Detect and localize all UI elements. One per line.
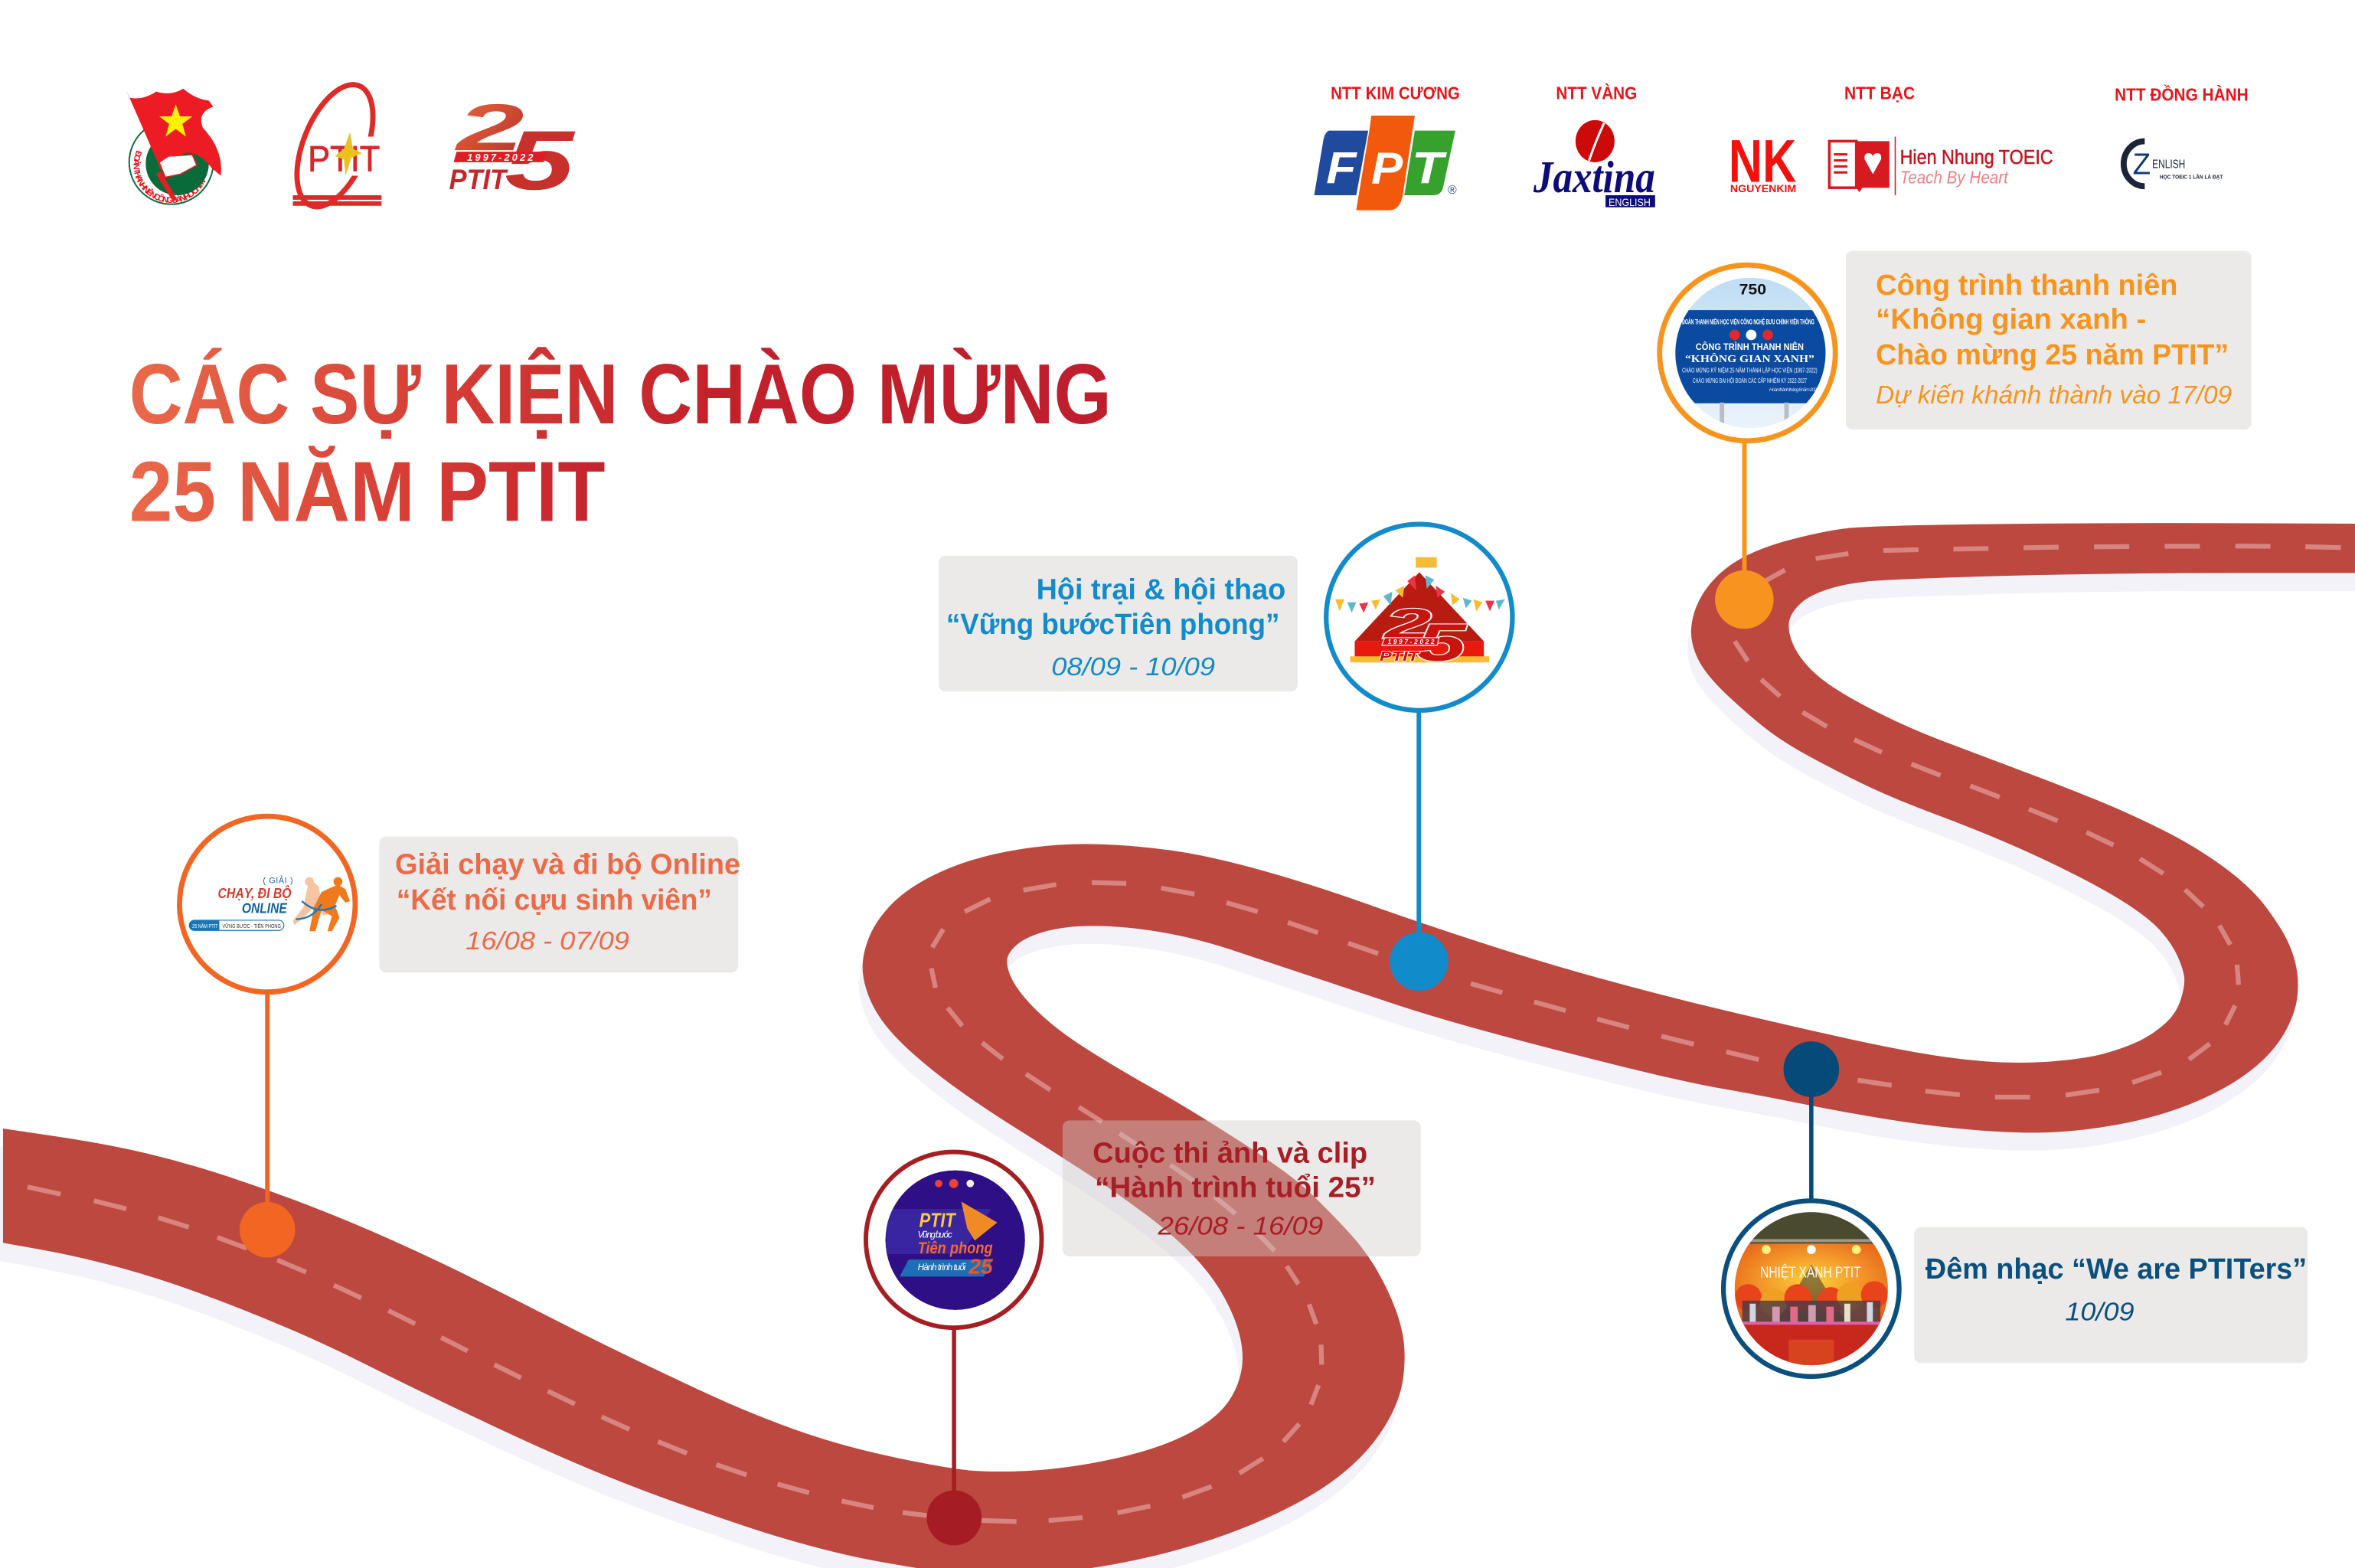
run logo: ONLINE (242, 900, 287, 916)
road marker amber (1715, 570, 1774, 629)
title: 25 NĂM PTIT (129, 444, 606, 540)
road marker dark red (926, 1491, 982, 1545)
sign board: CÔNG TRÌNH THANH NIÊN (1696, 342, 1804, 352)
connector line navy (1809, 1070, 1814, 1201)
logo: FPT: P (1371, 143, 1403, 193)
logo: Nguyen Kim: NGUYENKIM (1730, 183, 1796, 194)
contest poster: PTIT (919, 1210, 957, 1232)
card: Giai chay: 16/08 - 07/09 (465, 927, 629, 956)
logo: FPT: F (1326, 143, 1358, 193)
connector line dark red (952, 1326, 956, 1518)
logo: Hien Nhung TOEIC: Hien Nhung TOEIC (1900, 147, 2053, 168)
sign board (1670, 278, 1832, 428)
stage photo: NHIỆT XANH PTIT (1760, 1263, 1861, 1281)
circle frame dark red (866, 1152, 1041, 1328)
sign board: 750 (1739, 281, 1766, 298)
card: Hoi trai: “Vững bướcTiên phong” (946, 608, 1279, 641)
card: Cong trinh thanh nien: “Không gian xanh - (1876, 303, 2146, 336)
connector line orange (265, 991, 269, 1232)
sign board: “KHÔNG GIAN XANH” (1685, 352, 1814, 364)
run logo: 25 NĂM PTIT (192, 923, 218, 929)
circle frame blue (1326, 524, 1512, 710)
sponsor labels: NTT KIM CƯƠNG (1331, 83, 1460, 103)
logo: FPT: ® (1448, 184, 1457, 197)
sponsor labels (1331, 82, 2249, 104)
circle frame navy (1723, 1200, 1899, 1377)
road shadow (0, 541, 2355, 1568)
road marker orange (240, 1202, 296, 1258)
title: CÁC SỰ KIỆN CHÀO MỪNG (129, 346, 1112, 442)
run logo (189, 875, 350, 931)
card: Cuoc thi anh: Cuộc thi ảnh và clip (1093, 1136, 1367, 1169)
sign board: Hoàn thành tháng 8 năm 2022 (1769, 387, 1819, 393)
event: Cong trinh thanh nien (1660, 265, 1835, 629)
sponsor labels: NTT VÀNG (1556, 82, 1637, 103)
logo: 25 years: 2 (454, 91, 524, 165)
card: Cong trinh thanh nien: Công trình thanh niên (1876, 269, 2177, 302)
logo: PTIT (282, 74, 388, 217)
run logo: VỮNG BƯỚC - TIÊN PHONG (222, 923, 281, 929)
card: Cong trinh thanh nien (1846, 251, 2252, 430)
card: Giai chay (379, 837, 740, 972)
logo: 25 years: 1997-2022 (467, 152, 534, 163)
card: Hoi trai: 08/09 - 10/09 (1051, 653, 1215, 681)
card: Giai chay: “Kết nối cựu sinh viên” (397, 884, 712, 916)
sign board: CHÀO MỪNG KỶ NIỆM 25 NĂM THÀNH LẬP HỌC VIỆN (1997-2022) (1682, 365, 1818, 374)
card: Cuoc thi anh (1063, 1120, 1421, 1256)
logo: Hien Nhung TOEIC (1829, 137, 2053, 195)
stage photo (1733, 1210, 1890, 1368)
event: Giai chay (179, 816, 355, 1258)
card: Cuoc thi anh: 26/08 - 16/09 (1157, 1213, 1323, 1241)
logo: Zenlish (2124, 141, 2223, 186)
logo: Doan Thanh Nien (126, 89, 221, 205)
contest poster: Tiên phong (918, 1238, 993, 1257)
logo: 25 years: PTIT (449, 163, 508, 195)
card: Cong trinh thanh nien: Chào mừng 25 năm PTIT” (1876, 338, 2229, 371)
run logo: ( GIẢI ) (263, 875, 293, 885)
tent logo: PTIT (1380, 648, 1421, 664)
sign board: ĐOÀN THANH NIÊN HỌC VIỆN CÔNG NGHỆ BƯU CHÍNH VIỄN THÔNG (1682, 318, 1814, 326)
card: Dem nhac: 10/09 (2065, 1298, 2135, 1326)
tent logo: 1997-2022 (1388, 639, 1435, 645)
event: Hoi trai (1326, 524, 1512, 991)
contest poster: 25 (968, 1255, 993, 1279)
card: Giai chay: Giải chạy và đi bộ Online (395, 848, 740, 881)
circle frame orange (179, 816, 355, 992)
card: Cong trinh thanh nien: Dự kiến khánh thành vào 17/09 (1876, 381, 2232, 410)
event: Cuoc thi anh (866, 1152, 1041, 1545)
connector line amber (1743, 439, 1746, 601)
sign board: CHÀO MỪNG ĐẠI HỘI ĐOÀN CÁC CẤP NHIỆM KỲ 2022-2027 (1693, 377, 1807, 384)
tent logo: 2 (1383, 600, 1432, 648)
logo: Zenlish: HỌC TOEIC 1 LẦN LÀ ĐẠT (2160, 172, 2223, 180)
sponsor labels: NTT BẠC (1844, 83, 1915, 103)
circle frame amber (1660, 265, 1835, 441)
card: Dem nhac (1914, 1227, 2308, 1363)
logo: Jaxtina: Jaxtina (1533, 152, 1655, 202)
road marker blue (1390, 933, 1449, 991)
road marker navy (1784, 1041, 1839, 1097)
contest poster: Hành trình tuổi (918, 1263, 966, 1272)
logo: Jaxtina (1533, 120, 1655, 208)
logo: Jaxtina: ENGLISH (1609, 197, 1651, 208)
winding road (3, 523, 2355, 1568)
title (129, 346, 1112, 540)
sponsor labels: NTT ĐỒNG HÀNH (2115, 83, 2249, 104)
tent logo (1335, 557, 1505, 672)
card: Hoi trai (939, 556, 1298, 691)
logo: Hien Nhung TOEIC: Teach By Heart (1900, 167, 2009, 187)
run logo: CHẠY, ĐI BỘ (217, 885, 292, 901)
logo: 25 years (449, 91, 576, 207)
event: Dem nhac (1723, 1041, 1899, 1377)
contest poster: Vững bước (918, 1230, 952, 1240)
card: Hoi trai: Hội trại & hội thao (1037, 573, 1285, 606)
logo: Zenlish: ENLISH (2152, 158, 2185, 172)
logo: 25 years: 5 (505, 114, 576, 207)
card: Dem nhac: Đêm nhạc “We are PTITers” (1925, 1253, 2307, 1285)
contest poster (885, 1171, 1025, 1310)
logo: Nguyen Kim: NK (1729, 127, 1796, 194)
logo: FPT: T (1412, 143, 1448, 193)
connector line blue (1416, 709, 1421, 964)
logo: FPT (1315, 116, 1457, 211)
tent logo: 5 (1416, 613, 1467, 672)
logo: Zenlish: Z (2133, 148, 2151, 181)
logo: PTIT: PTIT (308, 139, 380, 179)
card: Cuoc thi anh: “Hành trình tuổi 25” (1095, 1171, 1376, 1204)
